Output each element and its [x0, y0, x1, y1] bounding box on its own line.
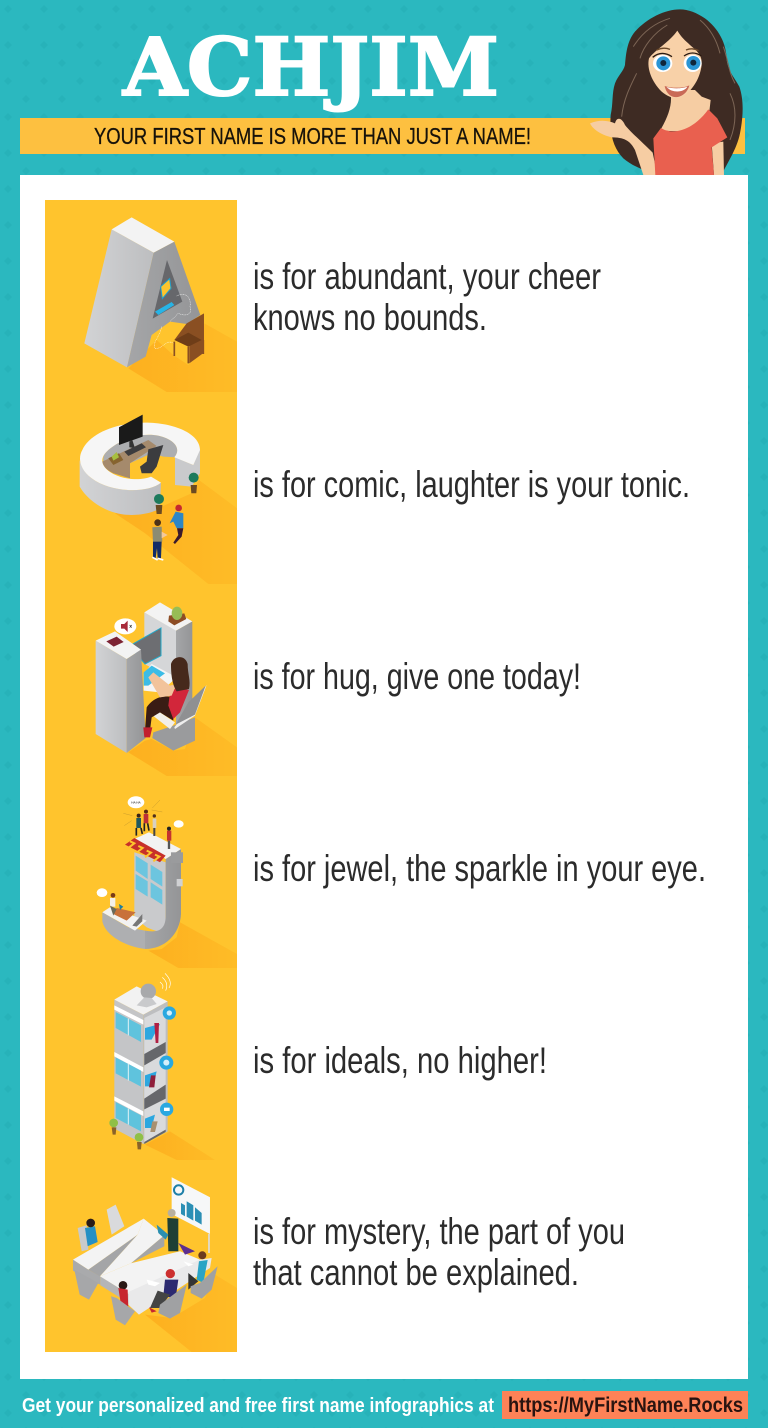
icon: letter A desk	[84, 217, 237, 392]
text block: A	[253, 256, 601, 338]
text block: M: that cannot be explained.	[253, 1252, 579, 1293]
icon: letter J building	[97, 796, 237, 968]
eyes	[653, 48, 702, 72]
text block: I: is for ideals, no higher!	[253, 1040, 547, 1081]
footer call to action: Get your personalized and free first name infographics at	[22, 1395, 494, 1417]
whiteboard	[172, 1177, 210, 1253]
shirt	[653, 109, 727, 175]
panel: yellow illustration column	[45, 200, 237, 1352]
subtitle banner: YOUR FIRST NAME IS MORE THAN JUST A NAME!	[94, 123, 531, 149]
text block: M: is for mystery, the part of you	[253, 1211, 625, 1252]
text block: M	[253, 1211, 625, 1293]
seated person with table	[97, 888, 142, 927]
letter M block	[73, 1219, 212, 1315]
seated people	[74, 1243, 218, 1325]
back chair and seated man	[78, 1205, 124, 1251]
panel: white content area	[20, 175, 748, 1379]
arm and hand	[590, 119, 657, 175]
rooftop people: HA HA	[131, 800, 142, 804]
far arm	[712, 142, 724, 175]
icon: letter H desk	[96, 602, 237, 776]
people	[152, 505, 183, 560]
icon: cartoon woman presenter	[590, 9, 743, 175]
text block: A: knows no bounds.	[253, 297, 487, 338]
seated woman	[143, 657, 207, 751]
subtitle banner	[20, 118, 745, 154]
icon: letter C reception	[80, 415, 237, 584]
text block: A: is for abundant, your cheer	[253, 256, 601, 297]
icon: letter M meeting table	[73, 1177, 237, 1352]
mouth	[665, 85, 689, 97]
text block: H: is for hug, give one today!	[253, 656, 581, 697]
rooftop people	[123, 796, 184, 849]
neck and chest	[660, 90, 711, 132]
presenter	[157, 1209, 178, 1251]
face	[648, 31, 702, 98]
icon: letter I tower	[109, 973, 215, 1160]
title: ACHJIM	[122, 20, 499, 114]
